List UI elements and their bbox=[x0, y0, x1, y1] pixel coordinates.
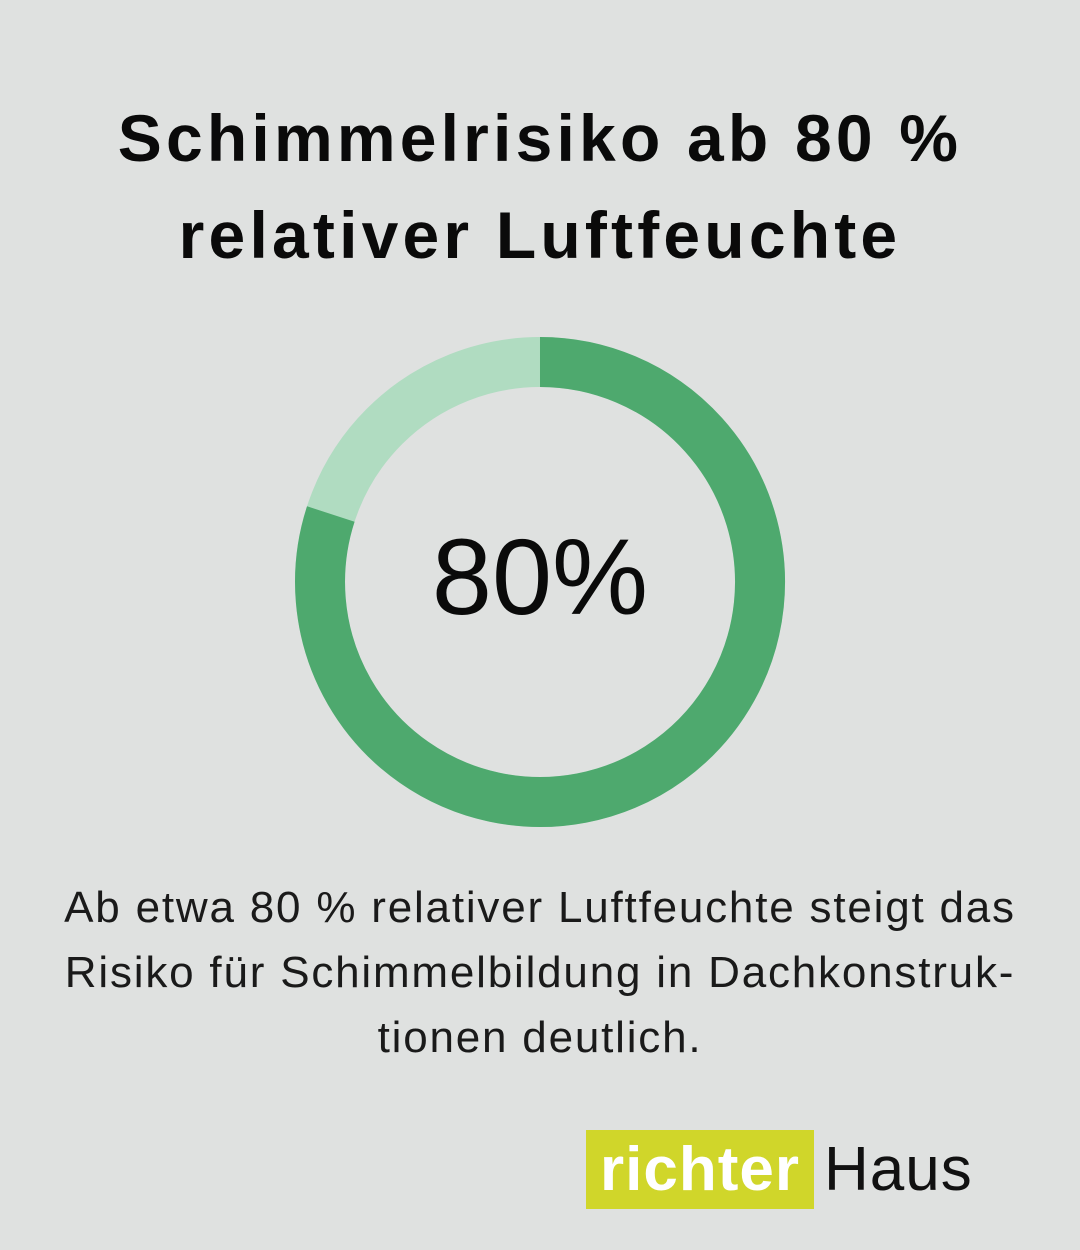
ring: value segment (80%) bbox=[320, 362, 760, 802]
title: relativer Luftfeuchte bbox=[179, 198, 901, 272]
ring: background segment (20%) bbox=[320, 362, 760, 802]
logo: richter bbox=[600, 1135, 800, 1204]
title: Schimmelrisiko ab 80 % bbox=[118, 101, 962, 175]
description text: Risiko für Schimmelbildung in Dachkonstruk- bbox=[65, 948, 1015, 997]
description text bbox=[64, 883, 1016, 1062]
logo bbox=[586, 1130, 973, 1209]
center value: 80% bbox=[432, 516, 648, 637]
title bbox=[118, 101, 962, 272]
logo: Haus bbox=[824, 1135, 973, 1204]
description text: Ab etwa 80 % relativer Luftfeuchte steigt das bbox=[64, 883, 1016, 932]
description text: tionen deutlich. bbox=[378, 1013, 702, 1062]
